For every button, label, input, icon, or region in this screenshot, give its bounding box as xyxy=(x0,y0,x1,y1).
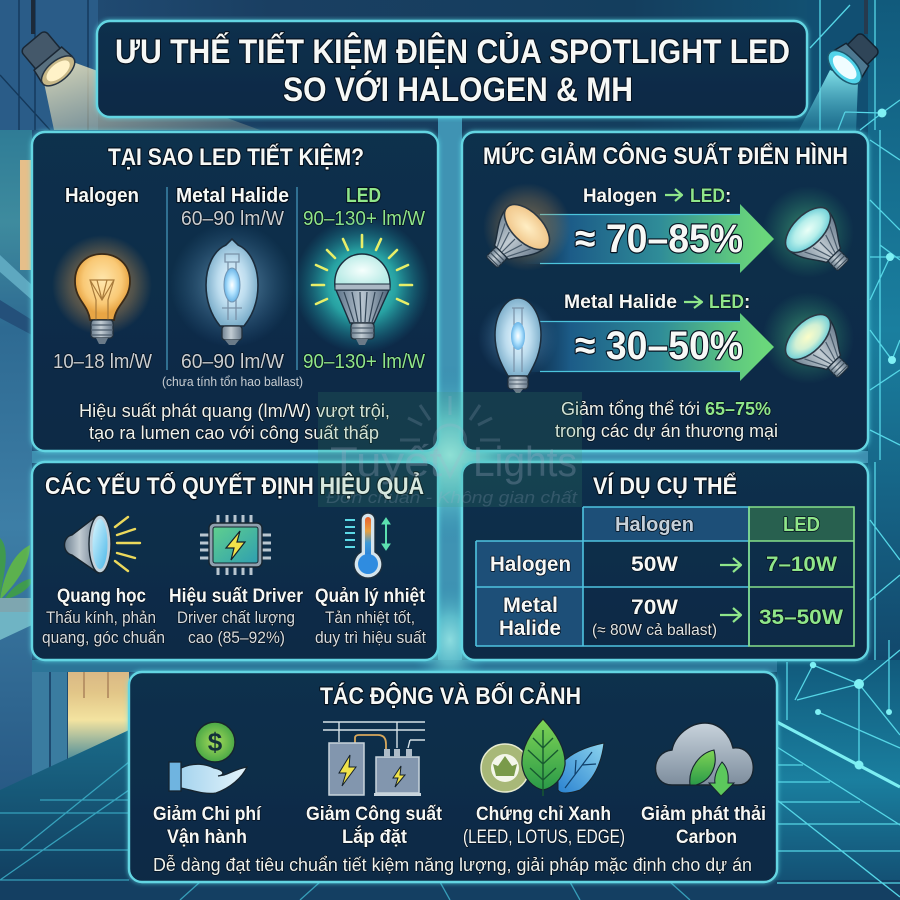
row: metal halide: 35–50W xyxy=(759,606,843,629)
icon: halogen spotlight xyxy=(472,183,571,282)
heading: why LED saves: TẠI SAO LED TIẾT KIỆM? xyxy=(108,143,364,171)
light beam: left lamp xyxy=(43,62,260,130)
header labels xyxy=(615,514,820,536)
panel: typical power reduction xyxy=(462,132,868,451)
icon: halogen bulb xyxy=(52,235,152,344)
impact labels: Lắp đặt xyxy=(342,824,407,848)
icon: hand and coin: $ xyxy=(208,727,223,757)
heading: decisive factors: CÁC YẾU TỐ QUYẾT ĐỊNH HIỆU QUẢ xyxy=(45,471,424,500)
bottom efficacy values: 60–90 lm/W xyxy=(181,351,284,373)
icon: driver chip xyxy=(200,515,271,575)
label: metal halide to LED: LED xyxy=(709,292,744,313)
impact labels xyxy=(153,803,766,848)
description: Hiệu suất phát quang (lm/W) vượt trội, xyxy=(79,400,390,421)
icon: optics lens xyxy=(64,515,140,573)
row: metal halide xyxy=(499,594,843,640)
description xyxy=(79,400,390,443)
panel: impact and context xyxy=(129,672,777,882)
column headers: LED xyxy=(346,185,381,207)
watermark xyxy=(318,392,582,507)
arrow: metal halide to LED xyxy=(520,313,774,381)
light beam: right lamp xyxy=(798,70,858,132)
watermark: Tuyết xyxy=(330,438,442,485)
label: halogen to LED xyxy=(583,186,731,207)
heading: examples: VÍ DỤ CỤ THỂ xyxy=(593,472,737,500)
factor descriptions: Tản nhiệt tốt, xyxy=(325,609,415,627)
network lines: right side circuit xyxy=(777,0,900,897)
header labels: Halogen xyxy=(615,514,694,536)
comparison table xyxy=(476,507,854,646)
label: metal halide to LED xyxy=(564,292,750,313)
header labels: LED xyxy=(783,514,820,536)
plant: left planter xyxy=(0,538,34,612)
summary: Giảm tổng thể tới xyxy=(561,398,700,419)
factor labels: Quang học xyxy=(57,585,146,607)
heading: impact: TÁC ĐỘNG VÀ BỐI CẢNH xyxy=(320,681,581,710)
row: metal halide: Metal xyxy=(503,594,558,617)
icon: thermometer xyxy=(345,513,390,578)
top efficacy values: 60–90 lm/W xyxy=(181,208,284,230)
description: tạo ra lumen cao với công suất thấp xyxy=(89,422,379,443)
heading: power reduction: MỨC GIẢM CÔNG SUẤT ĐIỂN HÌNH xyxy=(483,141,848,170)
summary: trong các dự án thương mại xyxy=(555,420,778,441)
value: metal halide reduction: ≈ 30–50% xyxy=(575,324,743,368)
label: metal halide to LED: : xyxy=(744,292,750,313)
impact labels: Giảm phát thải xyxy=(641,803,766,825)
icon: green certificate leaves xyxy=(481,719,604,796)
watermark: Đơn chuẩn - Không gian chất xyxy=(326,488,578,507)
bottom efficacy values: 90–130+ lm/W xyxy=(303,351,425,373)
top efficacy values: 90–130+ lm/W xyxy=(303,208,425,230)
impact labels: Giảm Công suất xyxy=(306,803,442,825)
icon: LED bulb xyxy=(294,217,430,353)
icon: carbon cloud xyxy=(656,723,753,796)
factor labels: Hiệu suất Driver xyxy=(169,585,303,607)
footer sentence: Dễ dàng đạt tiêu chuẩn tiết kiệm năng lượng, giải pháp mặc định cho dự án xyxy=(153,854,752,875)
title text: ƯU THẾ TIẾT KIỆM ĐIỆN CỦA SPOTLIGHT LED xyxy=(115,33,790,71)
icon: electrical installation xyxy=(323,722,425,796)
label: halogen to LED: Halogen xyxy=(583,186,657,207)
label: metal halide to LED: Metal Halide xyxy=(564,292,677,313)
factor descriptions: Driver chất lượng xyxy=(177,609,295,627)
row: metal halide: 70W xyxy=(631,596,678,619)
factor labels xyxy=(57,585,425,607)
row: halogen: 50W xyxy=(631,553,678,576)
label: halogen to LED: : xyxy=(725,186,731,207)
factor descriptions xyxy=(42,609,426,647)
icon: LED spotlight one xyxy=(762,186,863,285)
spotlight: top right xyxy=(822,0,885,90)
watermark: Lights xyxy=(473,438,577,485)
title banner xyxy=(97,21,807,117)
spotlight: top left xyxy=(17,0,80,91)
icon: metal halide bulb xyxy=(170,223,294,347)
row: halogen: Halogen xyxy=(490,553,571,576)
factor descriptions: Thấu kính, phản xyxy=(46,609,156,627)
title text: SO VỚI HALOGEN & MH xyxy=(283,71,633,109)
panel: decisive factors xyxy=(32,462,438,660)
panel: why LED saves xyxy=(32,132,438,451)
impact labels: Chứng chỉ Xanh xyxy=(476,803,611,825)
icon: metal halide lamp xyxy=(478,298,558,393)
bottom efficacy values xyxy=(53,351,425,373)
ballast note: (chưa tính tổn hao ballast) xyxy=(162,375,303,389)
impact labels: Carbon xyxy=(676,826,737,848)
row: metal halide: Halide xyxy=(499,617,561,640)
title text xyxy=(115,33,790,109)
label: halogen to LED: LED xyxy=(690,186,725,207)
factor labels: Quản lý nhiệt xyxy=(315,585,425,607)
top efficacy values xyxy=(181,208,425,230)
column headers: Halogen xyxy=(65,185,139,207)
column headers xyxy=(65,185,381,207)
row: metal halide: (≈ 80W cả ballast) xyxy=(592,622,717,639)
panel: concrete examples xyxy=(462,462,868,660)
row: halogen: 7–10W xyxy=(766,553,837,576)
arrow: halogen to LED xyxy=(520,204,774,273)
value: halogen reduction: ≈ 70–85% xyxy=(575,217,743,261)
row: halogen xyxy=(490,553,837,576)
summary xyxy=(555,398,778,441)
factor descriptions: cao (85–92%) xyxy=(188,629,285,647)
factor descriptions: duy trì hiệu suất xyxy=(315,629,426,647)
icon: hand and coin xyxy=(169,722,247,793)
impact labels: (LEED, LOTUS, EDGE) xyxy=(463,826,625,848)
column headers: Metal Halide xyxy=(176,185,289,207)
factor descriptions: quang, góc chuẩn xyxy=(42,629,165,647)
icon: LED spotlight two xyxy=(762,292,863,392)
summary: 65–75% xyxy=(705,398,771,419)
impact labels: Giảm Chi phí xyxy=(153,803,262,825)
impact labels: Vận hành xyxy=(167,826,247,848)
bottom efficacy values: 10–18 lm/W xyxy=(53,351,152,373)
